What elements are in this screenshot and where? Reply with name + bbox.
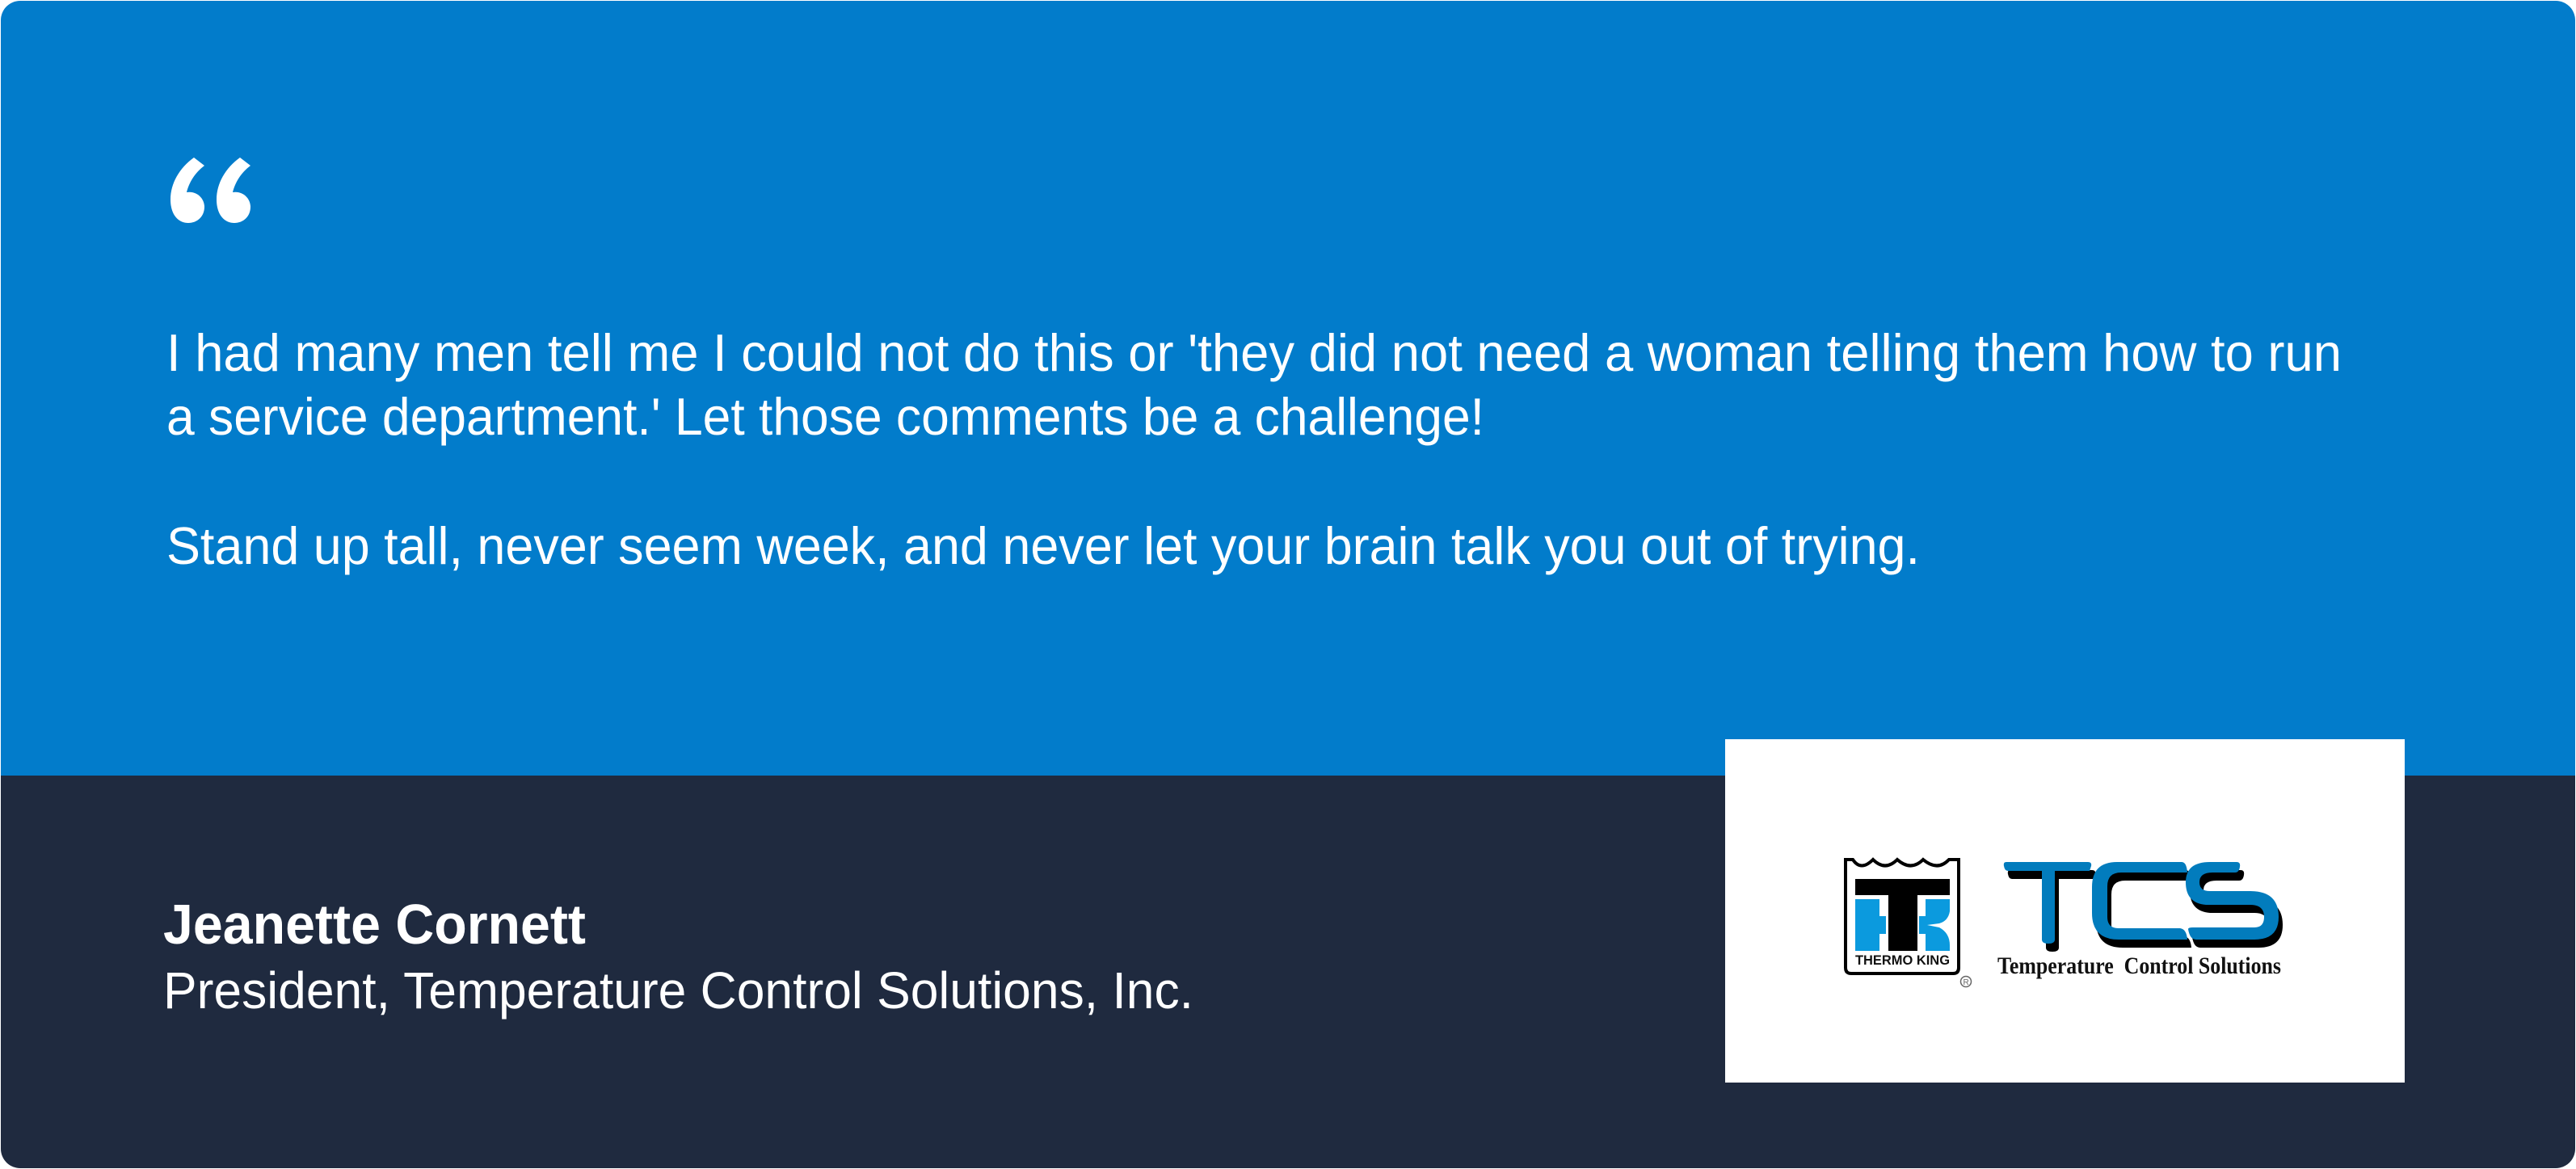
icon: Thermo King logo: R bbox=[1964, 978, 1969, 987]
TCS tagline: Temperature Control Solutions bbox=[1997, 952, 2281, 979]
icon: Thermo King logo: THERMO KING bbox=[1855, 953, 1950, 968]
panel: blue quote background bbox=[0, 0, 2576, 776]
quote text: I had many men tell me I could not do this or 'they did not need a woman telling them how to run bbox=[166, 323, 2342, 382]
attribution title: President, Temperature Control Solutions, Inc. bbox=[163, 961, 1193, 1020]
attribution name: Jeanette Cornett bbox=[163, 893, 586, 956]
icon: Thermo King logo bbox=[1846, 860, 1972, 987]
icon: TCS logo bbox=[1997, 862, 2283, 979]
quote text: Stand up tall, never seem week, and never let your brain talk you out of trying. bbox=[166, 516, 1920, 575]
panel: logo card bbox=[1725, 739, 2405, 1083]
icon: opening quotation mark bbox=[170, 158, 250, 223]
TCS letterforms bbox=[2004, 862, 2279, 944]
quote text bbox=[166, 323, 2342, 575]
quote text: a service department.' Let those comments be a challenge! bbox=[166, 387, 1484, 446]
TCS shadow bbox=[2008, 870, 2283, 952]
panel: navy attribution background bbox=[0, 776, 2576, 1169]
